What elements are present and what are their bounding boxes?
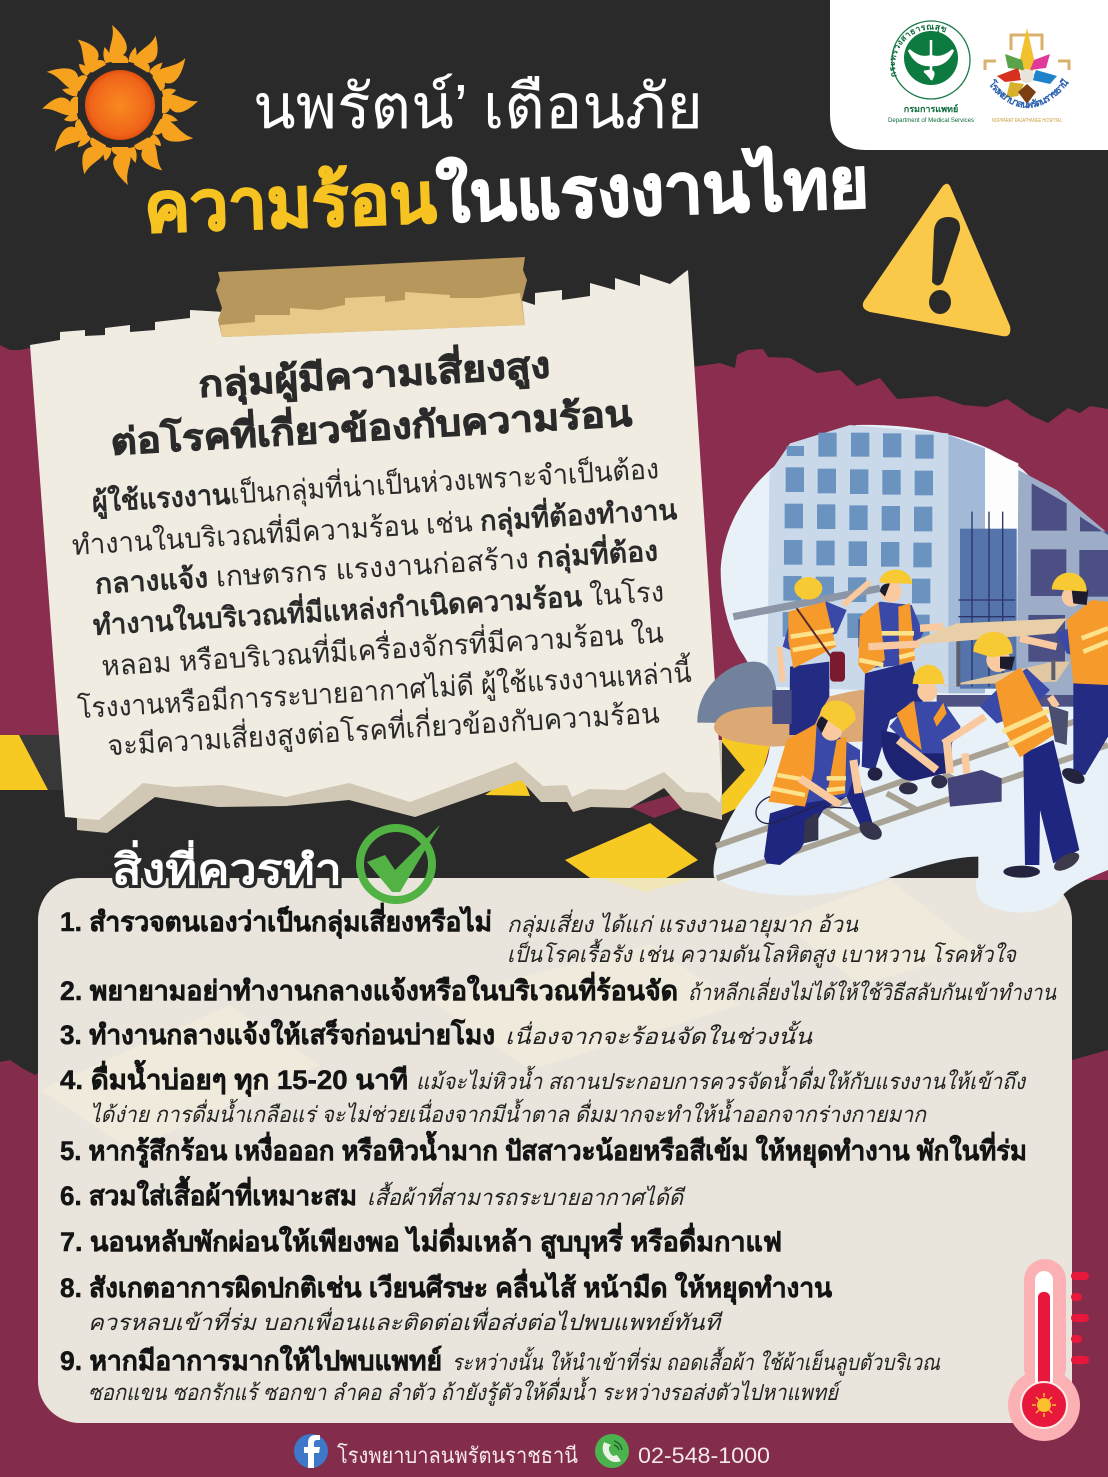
footer contact [294, 1434, 770, 1468]
item 7: 7. นอนหลับพักผ่อนให้เพียงพอ ไม่ดื่มเหล้า สูบบุหรี่ หรือดื่มกาแฟ [60, 1222, 782, 1259]
recommendations card [38, 878, 1072, 1423]
item 9: 9. หากมีอาการมากให้ไปพบแพทย์ [60, 1345, 442, 1376]
background: hazard stripes [0, 730, 770, 890]
paper body text: หลอม หรือบริเวณที่มีเครื่องจักรที่มีความร้อน ใน [100, 613, 664, 682]
logo: ministry of public health: Department of Medical Services [888, 117, 975, 124]
paper shadow edge [75, 740, 722, 833]
pipe [733, 588, 880, 617]
worker: crouching centre [881, 665, 961, 794]
item 2: 2. พยายามอย่าทำงานกลางแจ้งหรือในบริเวณที่ร้อนจัด [60, 971, 678, 1006]
ladder rails [716, 710, 1108, 878]
title line 2: ความร้อนในแรงงานไทย [143, 142, 870, 247]
item 6: เสื้อผ้าที่สามารถระบายอากาศได้ดี [367, 1181, 686, 1210]
item 9: ซอกแขน ซอกรักแร้ ซอกขา ลำคอ ลำตัว ถ้ายังรู้ตัวให้ดื่มน้ำ ระหว่างรอส่งตัวไปหาแพทย์ [88, 1376, 843, 1406]
item 4: ได้ง่าย การดื่มน้ำเกลือแร่ จะไม่ช่วยเนื่องจากมีน้ำตาล ดื่มมากจะทำให้น้ำออกจากร่างกายมาก [90, 1098, 928, 1127]
worker: right edge [1020, 573, 1108, 787]
item 6: 6. สวมใส่เสื้อผ้าที่เหมาะสม [60, 1175, 357, 1211]
item 8: ควรหลบเข้าที่ร่ม บอกเพื่อนและติดต่อเพื่อส่งต่อไปพบแพทย์ทันที [88, 1307, 723, 1335]
buildings [767, 425, 1108, 707]
footer phone number: 02-548-1000 [638, 1443, 770, 1468]
worker: kneeling front [756, 700, 885, 865]
background: maroon lower band [0, 1050, 1108, 1477]
logo: ministry of public health: กรมการแพทย์ [904, 103, 958, 114]
item 8 [60, 1268, 833, 1335]
logo: nopparat rajathanee hospital: โรงพยาบาลนพรัตนราชธานี [990, 78, 1069, 108]
paper body text: ทำงานในบริเวณที่มีความร้อน เช่น กลุ่มที่ต้องทำงาน [71, 489, 678, 563]
paper body text: ผู้ใช้แรงงานเป็นกลุ่มที่น่าเป็นห่วงเพราะจำเป็นต้อง [91, 449, 660, 520]
item 4 [60, 1059, 1027, 1127]
worker: bending with pointer [943, 632, 1082, 878]
icon: thermometer [1008, 1259, 1089, 1441]
logo: ministry of public health: กระทรวงสาธารณสุข [890, 24, 946, 77]
item 4: 4. ดื่มน้ำบ่อยๆ ทุก 15-20 นาที [60, 1059, 408, 1097]
item 3: เนื่องจากจะร้อนจัดในช่วงนั้น [505, 1020, 813, 1049]
logo panel [830, 0, 1108, 150]
icon: phone [595, 1434, 629, 1468]
logo: ministry of public health [888, 20, 975, 124]
paper body text: จะมีความเสี่ยงสูงต่อโรคที่เกี่ยวข้องกับความร้อน [106, 694, 660, 763]
control box [947, 770, 1002, 807]
item 4: แม้จะไม่หิวน้ำ สถานประกอบการควรจัดน้ำดื่มให้กับแรงงานให้เข้าถึง [416, 1065, 1027, 1094]
paper heading: ต่อโรคที่เกี่ยวข้องกับความร้อน [109, 387, 633, 463]
logo: nopparat rajathanee hospital [984, 28, 1070, 124]
paper body text: โรงงานหรือมีการระบายอากาศไม่ดี ผู้ใช้แรงงานเหล่านี้ [76, 652, 692, 726]
icon: facebook [294, 1434, 328, 1468]
paper body text [71, 449, 692, 763]
icon: green check [360, 825, 440, 900]
paper body text: ทำงานในบริเวณที่มีแหล่งกำเนิดความร้อน ในโรง [92, 571, 665, 641]
item 9: ระหว่างนั้น ให้นำเข้าที่ร่ม ถอดเสื้อผ้า ใช้ผ้าเย็นลูบตัวบริเวณ [452, 1346, 941, 1376]
item 2: ถ้าหลีกเลี่ยงไม่ได้ให้ใช้วิธีสลับกันเข้าทำงาน [688, 977, 1057, 1005]
item 3 [60, 1017, 813, 1050]
worker: standing centre [858, 570, 943, 781]
item 5: 5. หากรู้สึกร้อน เหงื่อออก หรือหิวน้ำมาก ปัสสาวะน้อยหรือสีเข้ม ให้หยุดทำงาน พักในที่ร่ม [60, 1130, 1027, 1168]
paper body text: กลางแจ้ง เกษตรกร แรงงานก่อสร้าง กลุ่มที่ต้อง [94, 530, 659, 602]
paper heading: กลุ่มผู้มีความเสี่ยงสูง [197, 339, 551, 408]
item 1: เป็นโรคเรื้อรัง เช่น ความดันโลหิตสูง เบาหวาน โรคหัวใจ [507, 938, 1017, 968]
background: maroon torn band [0, 345, 1108, 880]
paper note panel [30, 257, 722, 833]
ground mounds [697, 662, 887, 747]
item 3: 3. ทำงานกลางแจ้งให้เสร็จก่อนบ่ายโมง [60, 1017, 495, 1050]
item 1: 1. สำรวจตนเองว่าเป็นกลุ่มเสี่ยงหรือไม่ [60, 902, 492, 939]
item 6 [60, 1175, 686, 1211]
footer hospital name: โรงพยาบาลนพรัตนราชธานี [337, 1443, 578, 1468]
title line 1: นพรัตน์’ เตือนภัย [253, 73, 703, 142]
paper sheet [30, 270, 722, 820]
illustration backdrop blob [713, 425, 1108, 912]
sun icon [42, 25, 198, 185]
item 1: กลุ่มเสี่ยง ได้แก่ แรงงานอายุมาก อ้วน [507, 909, 859, 938]
plank [917, 618, 1067, 644]
item 2 [60, 971, 1057, 1006]
worker: back with bag [772, 577, 870, 735]
section heading: things to do: สิ่งที่ควรทำ [112, 840, 342, 893]
item 1 [60, 902, 1017, 968]
construction workers illustration [697, 425, 1108, 912]
item 8: 8. สังเกตอาการผิดปกติเช่น เวียนศีรษะ คลื่นไส้ หน้ามืด ให้หยุดทำงาน [60, 1268, 833, 1305]
paper heading [109, 339, 633, 463]
warning triangle icon [863, 184, 1010, 336]
logo: nopparat rajathanee hospital: NOPPARAT RAJATHANEE HOSPITAL [992, 118, 1062, 124]
tape [216, 257, 527, 337]
item 9 [60, 1345, 941, 1406]
